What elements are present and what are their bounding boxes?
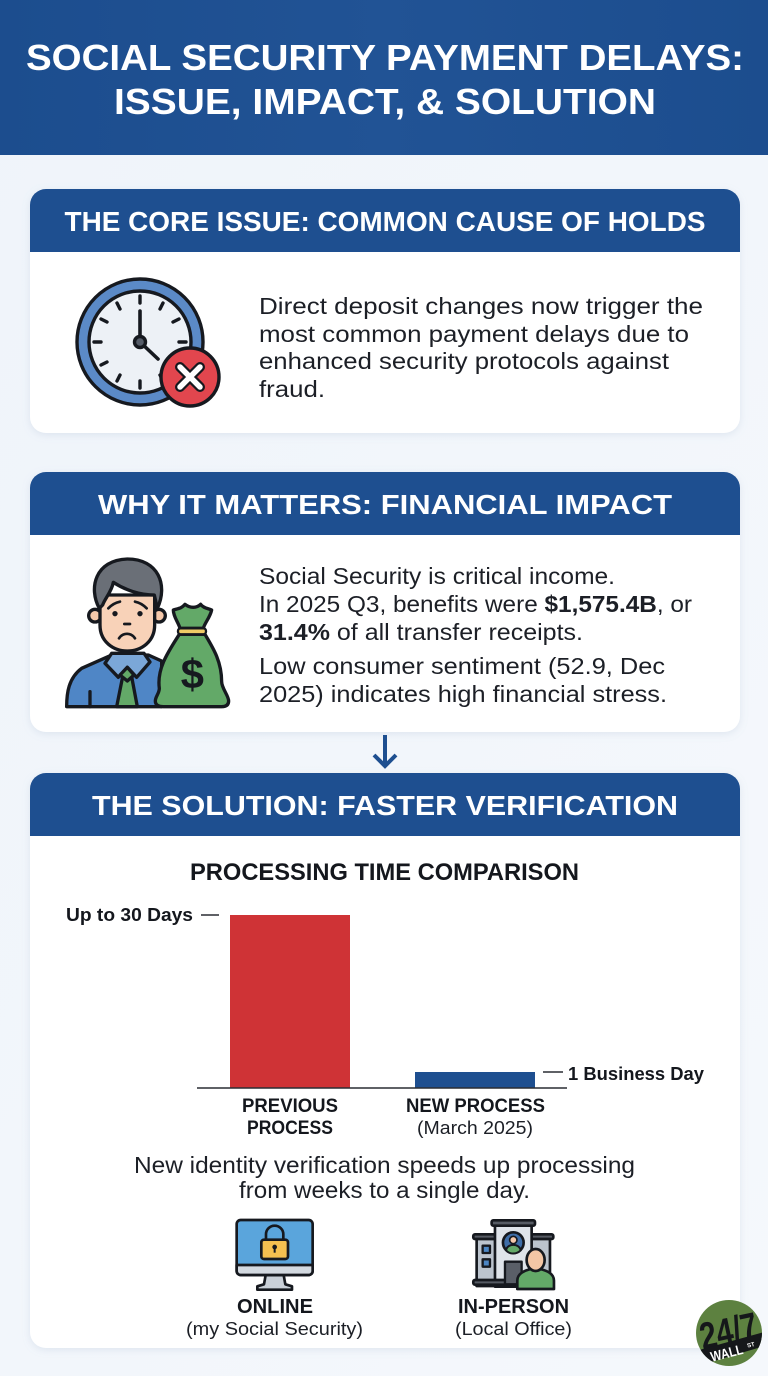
text: core issue description xyxy=(259,293,703,402)
title banner xyxy=(0,0,768,155)
icon: local office with person xyxy=(473,1220,554,1289)
label: in-person: (Local Office) xyxy=(455,1318,572,1339)
bar chart: processing time: Up to 30 Days xyxy=(66,905,193,925)
panel heading: why it matters xyxy=(30,472,740,535)
bar: new process xyxy=(415,1072,535,1088)
arrow: down to solution xyxy=(374,735,396,766)
text: financial impact: Low consumer sentiment (52.9, Dec xyxy=(259,653,665,679)
icon: computer with padlock xyxy=(237,1220,313,1290)
text: core issue description: fraud. xyxy=(259,376,325,402)
text: financial impact: 31.4% of all transfer receipts. xyxy=(259,619,583,645)
label: online xyxy=(186,1296,363,1339)
text: verification summary: from weeks to a single day. xyxy=(239,1177,530,1203)
text: financial impact: 2025) indicates high financial stress. xyxy=(259,681,667,707)
text: verification summary xyxy=(134,1152,635,1203)
bar chart: processing time: PREVIOUS xyxy=(242,1096,338,1117)
bar chart: processing time xyxy=(66,905,704,1139)
chart heading: PROCESSING TIME COMPARISON xyxy=(190,859,579,886)
panel: the core issue xyxy=(30,189,740,433)
panel heading: why it matters: WHY IT MATTERS: FINANCIAL IMPACT xyxy=(98,489,672,520)
panel heading: solution xyxy=(30,773,740,836)
panel heading: core issue: THE CORE ISSUE: COMMON CAUSE OF HOLDS xyxy=(64,206,706,237)
label: in-person: IN-PERSON xyxy=(458,1296,569,1318)
text: core issue description: Direct deposit changes now trigger the xyxy=(259,293,703,319)
bar chart: processing time: (March 2025) xyxy=(417,1118,533,1138)
title banner: SOCIAL SECURITY PAYMENT DELAYS: xyxy=(26,37,744,78)
logo: 24/7 Wall St: WALL xyxy=(709,1341,745,1365)
panel heading: core issue xyxy=(30,189,740,252)
icon: clock with red x xyxy=(77,279,219,406)
panel: the solution xyxy=(30,773,740,1348)
text: core issue description: most common payment delays due to xyxy=(259,321,689,347)
label: online: ONLINE xyxy=(237,1296,313,1318)
panel: why it matters xyxy=(30,472,740,732)
logo: 24/7 Wall St: ST xyxy=(747,1342,756,1350)
icon: worried man with money bag: $ xyxy=(181,650,204,697)
title banner: ISSUE, IMPACT, & SOLUTION xyxy=(114,81,656,122)
label: online: (my Social Security) xyxy=(186,1318,363,1339)
bar chart: processing time: NEW PROCESS xyxy=(406,1096,545,1117)
text: core issue description: enhanced security protocols against xyxy=(259,348,670,374)
text: financial impact xyxy=(259,563,692,707)
panel heading: solution: THE SOLUTION: FASTER VERIFICATION xyxy=(92,790,678,821)
bar chart: processing time: 1 Business Day xyxy=(568,1064,704,1084)
bar chart: processing time: PROCESS xyxy=(247,1118,333,1139)
text: verification summary: New identity verification speeds up processing xyxy=(134,1152,635,1178)
text: financial impact: Social Security is critical income. xyxy=(259,563,615,589)
bar: previous process xyxy=(230,915,350,1088)
label: in-person xyxy=(455,1296,572,1339)
text: financial impact: In 2025 Q3, benefits were $1,575.4B , or xyxy=(259,591,692,617)
icon: worried man with money bag xyxy=(67,559,229,707)
